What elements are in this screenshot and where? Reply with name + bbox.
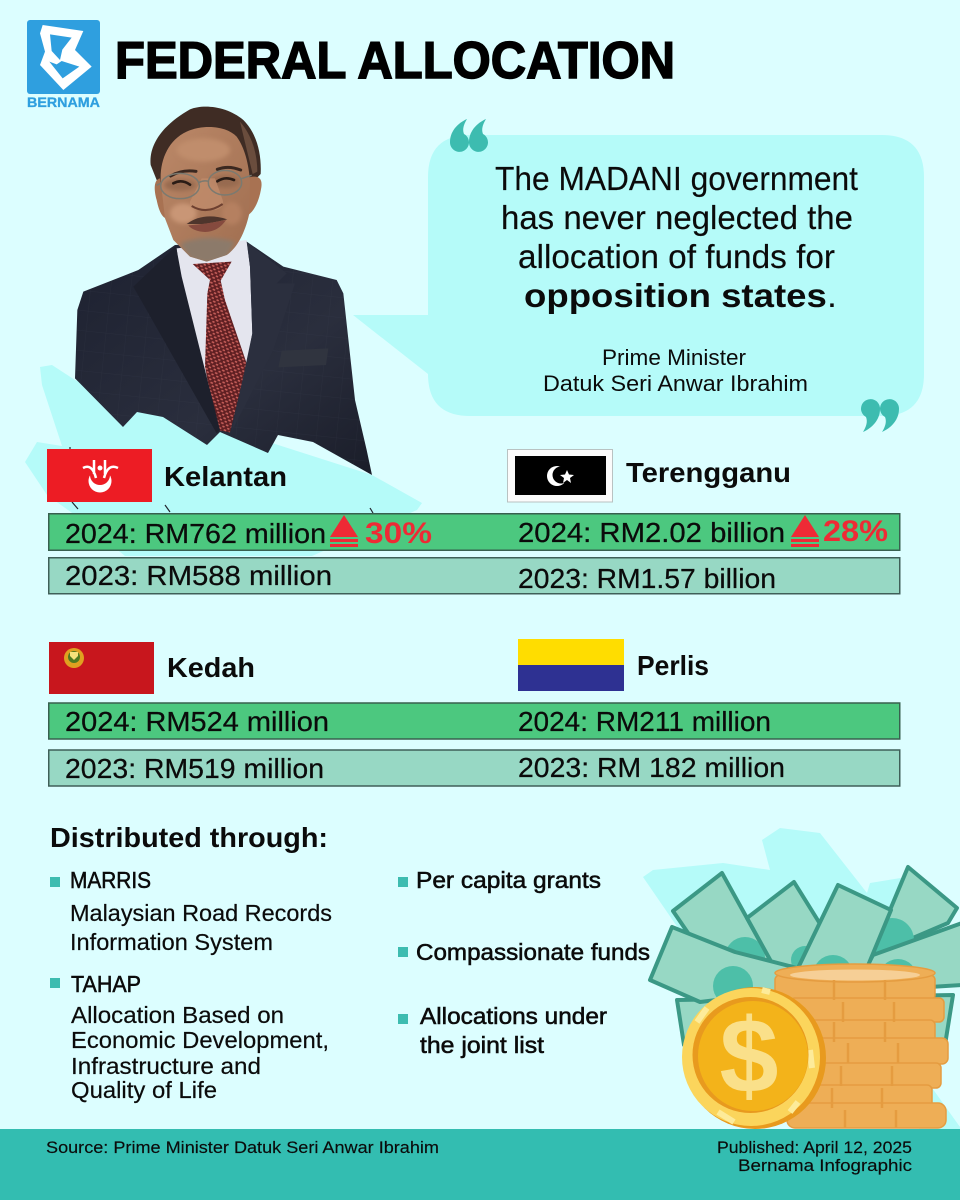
increase arrow: Kelantan [330,515,358,547]
quote attribution: Datuk Seri Anwar Ibrahim [543,371,808,396]
quote text: The MADANI government [495,160,858,197]
banknote bottom [677,995,953,1045]
quote attribution: Prime Minister [602,345,746,370]
footer publication info [717,1138,913,1175]
banknote back left [673,873,773,990]
footer publication info: Published: April 12, 2025 [717,1138,912,1157]
list item: MARRIS: MARRIS [70,867,151,893]
quote text [495,160,858,314]
increase arrow: Terengganu [791,515,819,547]
heading: distributed through: Distributed through: [50,822,328,853]
face [161,127,250,262]
row: 2023 Kelantan and Terengganu [49,558,900,594]
glasses [157,170,252,199]
eyes [173,178,234,185]
list item: TAHAP: TAHAP [71,971,141,997]
eyebrows [171,167,241,176]
panel: Kedah [49,642,255,694]
tie [193,262,247,432]
row: 2023 Kedah and Perlis: 2023: RM 182 million [518,752,785,783]
illustration: gold coin [682,987,826,1129]
flag: Terengganu [508,450,612,502]
banknote front middle [798,885,891,995]
banknote front left [650,927,800,1006]
pocket [278,348,328,367]
list item: compassionate funds: Compassionate funds [416,939,650,965]
quote mark open [450,119,488,152]
list item: TAHAP: Allocation Based on [71,1002,284,1028]
brush stroke behind person and Kelantan [25,365,422,556]
list item: MARRIS: Information System [70,929,273,955]
banknote front right [866,923,960,997]
state name: Kelantan: Kelantan [164,461,287,492]
face shading [164,138,242,263]
quote mark close [861,399,899,432]
state name: Terengganu: Terengganu [626,457,791,488]
suit check [75,242,372,475]
brush stroke behind money [643,828,960,1135]
list item: allocations under the joint list [398,1003,607,1058]
lips [188,220,226,232]
logo letter B [40,25,92,90]
speech bubble [353,135,924,416]
list item: per capita grants: Per capita grants [416,867,601,893]
flag: Kedah [49,642,154,694]
footer band [0,1129,960,1200]
list item: allocations under the joint list: Allocations under [420,1003,607,1029]
panel: Terengganu [508,450,791,502]
suit [75,242,372,475]
row: 2023 Kelantan and Terengganu: 2023: RM588 million [65,560,332,591]
row: 2023 Kedah and Perlis [49,750,900,786]
row: 2024 Kedah and Perlis [49,703,900,739]
state name: Kedah: Kedah [167,652,255,683]
list item: TAHAP: Infrastructure and [71,1053,261,1079]
quote text: allocation of funds for [518,238,835,275]
list item: TAHAP: Quality of Life [71,1077,217,1103]
brush edge specks [70,447,373,513]
row: 2024 Kelantan and Terengganu: 2024: RM2.02 billion [518,517,785,548]
moustache [187,216,227,224]
title: FEDERAL ALLOCATION [115,32,675,90]
logo wordmark: BERNAMA [27,94,100,110]
row: 2024 Kelantan and Terengganu [49,514,900,550]
logo [27,20,100,110]
hair [150,107,261,188]
logo square [27,20,100,94]
list item: TAHAP [50,971,329,1103]
flag: Perlis [518,639,624,691]
left ear [155,178,167,218]
footer publication info: Bernama Infographic [738,1156,913,1175]
left lapel [133,246,220,433]
quote text: opposition states . [524,277,837,314]
banknote back right [870,867,957,962]
list item: MARRIS: Malaysian Road Records [70,900,332,926]
portrait: prime minister [75,107,372,475]
list item: MARRIS [50,867,332,955]
list item: allocations under the joint list: the joint list [420,1032,545,1058]
panel: Perlis [518,639,709,691]
flag: Kelantan [47,449,152,502]
shirt [177,240,252,430]
quote text: has never neglected the [501,199,853,236]
row: 2024 Kelantan and Terengganu: 2024: RM762 million [65,518,326,549]
row: 2023 Kelantan and Terengganu: 2023: RM1.57 billion [518,563,776,594]
head [150,107,262,263]
panel: Kelantan [47,449,287,502]
illustration: banknotes [650,867,960,1045]
nose [190,178,223,210]
state name: Perlis: Perlis [637,650,709,681]
quote attribution [543,345,808,396]
increase: 30%: 30% [365,517,432,550]
hair highlight [240,122,257,174]
right ear [248,177,262,215]
row: 2024 Kedah and Perlis: 2024: RM211 million [518,706,771,737]
torso [75,240,372,475]
row: 2024 Kedah and Perlis: 2024: RM524 million [65,706,329,737]
row: 2023 Kedah and Perlis: 2023: RM519 million [65,753,324,784]
illustration: gold coin: $ [720,997,778,1115]
illustration: coin stack [775,964,948,1128]
footer source: Source: Prime Minister Datuk Seri Anwar Ibrahim [46,1138,439,1157]
right lapel [232,242,295,432]
increase: 28%: 28% [823,515,888,548]
list item: TAHAP: Economic Development, [71,1027,329,1053]
banknote back middle [747,882,822,974]
